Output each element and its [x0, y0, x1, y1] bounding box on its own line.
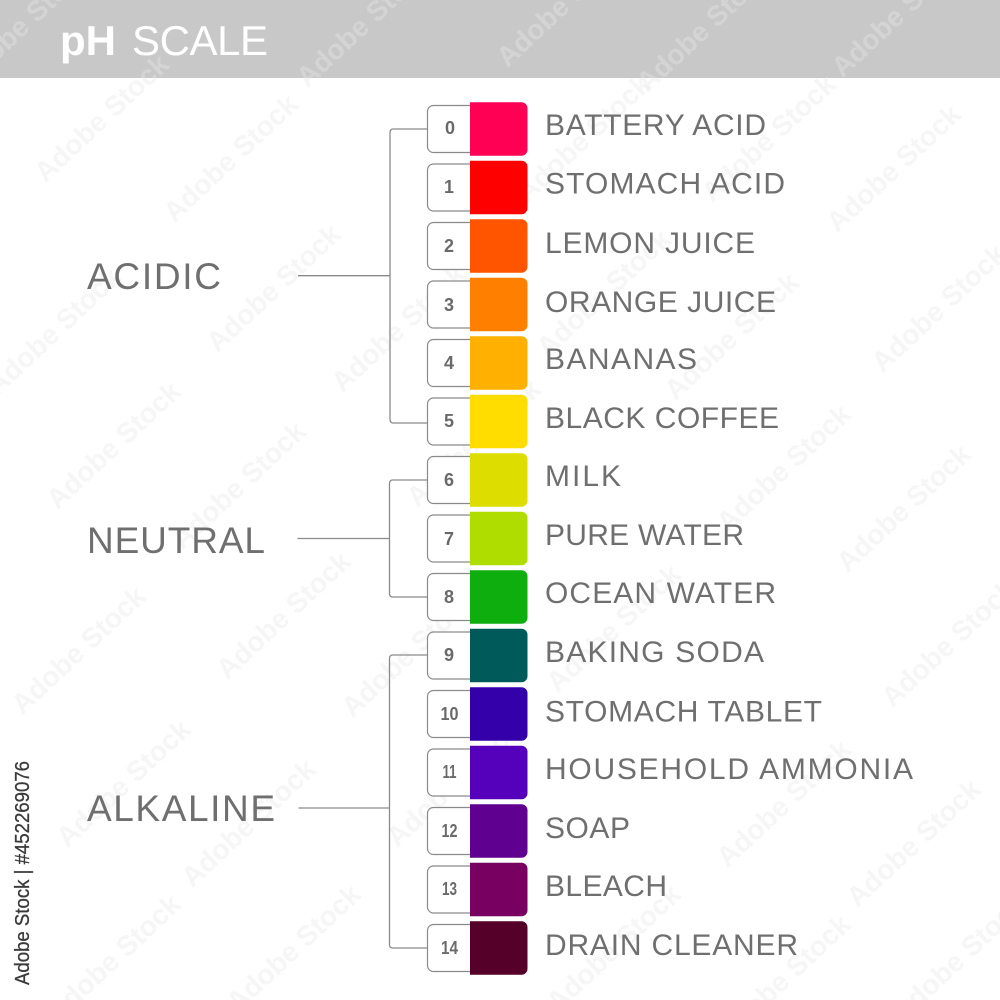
pH 14 row: [428, 921, 798, 975]
pH 0 row: [428, 102, 766, 156]
pH 11 row: HOUSEHOLD AMMONIA: [545, 753, 913, 786]
pH 1 row: [428, 161, 785, 214]
pH 0 row: 0: [445, 118, 455, 138]
pH 2 row: [428, 219, 755, 273]
pH 7 row: [428, 512, 744, 565]
title: [60, 17, 268, 64]
pH 10 row: [428, 687, 822, 741]
pH 6 row: 6: [444, 470, 454, 490]
pH 5 row: 5: [444, 411, 454, 431]
pH 5 row: [428, 395, 779, 448]
text: Adobe Stock: [40, 375, 187, 515]
pH 2 row: 2: [444, 236, 454, 256]
pH 4 row: BANANAS: [545, 343, 697, 376]
text: Adobe Stock: [210, 545, 357, 685]
pH 1 row: 1: [444, 177, 454, 197]
pH 8 row: 8: [444, 587, 454, 607]
pH 7 row: PURE WATER: [545, 519, 744, 552]
pH 2 row: LEMON JUICE: [545, 227, 755, 260]
text: Adobe Stock: [335, 583, 482, 723]
category: acidic: [87, 129, 427, 423]
text: Adobe Stock: [820, 98, 967, 238]
text: Adobe Stock: [400, 373, 547, 513]
category: acidic: ACIDIC: [87, 256, 221, 297]
text: Adobe Stock: [157, 88, 304, 228]
pH 9 row: 9: [444, 645, 454, 665]
text: Adobe Stock: [695, 68, 842, 208]
pH 8 row: OCEAN WATER: [545, 577, 776, 610]
category: neutral: NEUTRAL: [87, 520, 265, 561]
pH 8 row: [428, 570, 776, 624]
pH 9 row: BAKING SODA: [545, 636, 764, 669]
text: Adobe Stock: [200, 218, 347, 358]
pH 5 row: BLACK COFFEE: [545, 402, 779, 435]
header bar: [0, 0, 1000, 78]
pH 12 row: 12: [442, 821, 458, 841]
text: Adobe Stock: [710, 398, 857, 538]
pH 7 row: 7: [444, 529, 454, 549]
category: alkaline: [87, 655, 427, 948]
pH 13 row: [428, 863, 667, 916]
pH 4 row: [428, 336, 697, 390]
pH 13 row: 13: [442, 879, 457, 899]
text: Adobe Stock: [830, 438, 977, 578]
category: neutral: [87, 480, 427, 597]
pH 10 row: 10: [440, 704, 458, 724]
text: Adobe Stock: [510, 68, 657, 208]
side credit: Adobe Stock | #452269076: [12, 761, 34, 985]
pH 12 row: [428, 804, 630, 858]
category: alkaline: ALKALINE: [87, 788, 275, 829]
pH 11 row: 11: [442, 762, 456, 782]
pH 6 row: MILK: [545, 460, 621, 493]
pH 13 row: BLEACH: [545, 870, 667, 903]
pH 11 row: [428, 746, 913, 799]
text: Adobe Stock: [325, 258, 472, 398]
text: Adobe Stock: [5, 580, 152, 720]
text: Adobe Stock: [540, 558, 687, 698]
pH 14 row: 14: [441, 938, 458, 958]
text: Adobe Stock: [658, 266, 805, 406]
pH 1 row: STOMACH ACID: [545, 168, 785, 200]
text: Adobe Stock: [165, 415, 312, 555]
pH 3 row: ORANGE JUICE: [545, 286, 776, 319]
text: Adobe Stock: [175, 753, 322, 893]
pH 14 row: DRAIN CLEANER: [545, 929, 798, 962]
pH 9 row: [428, 629, 764, 682]
pH 3 row: 3: [444, 295, 454, 315]
pH 10 row: STOMACH TABLET: [545, 696, 822, 728]
title: SCALE: [132, 17, 268, 64]
text: Adobe Stock: [50, 713, 197, 853]
text: Adobe Stock: [28, 48, 175, 188]
text: Adobe Stock: [380, 713, 527, 853]
text: Adobe Stock: [530, 223, 677, 363]
text: Adobe Stock: [710, 733, 857, 873]
pH 3 row: [428, 278, 776, 331]
pH 4 row: 4: [444, 353, 454, 373]
title: pH: [60, 17, 116, 64]
pH 12 row: SOAP: [545, 812, 630, 845]
pH 6 row: [428, 453, 621, 507]
text: Adobe Stock: [840, 773, 987, 913]
pH 0 row: BATTERY ACID: [545, 109, 766, 142]
